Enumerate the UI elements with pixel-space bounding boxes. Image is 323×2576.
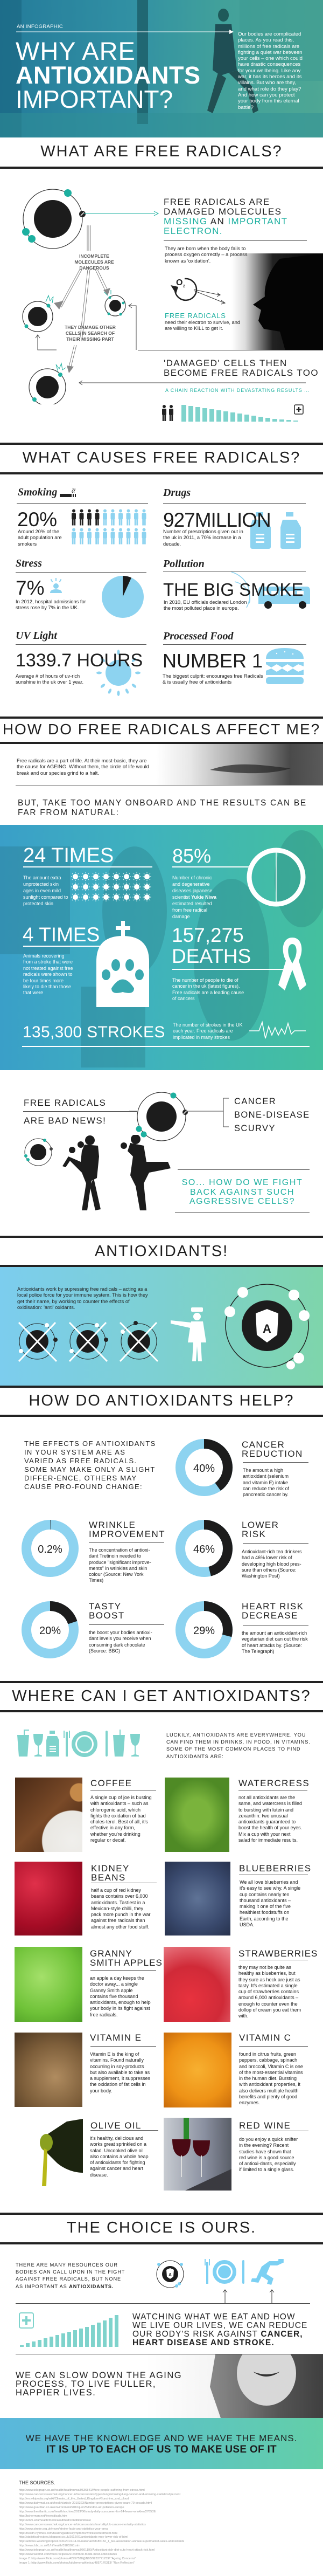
header: how do free radicals affect me: HOW DO FREE RADICALS AFFECT ME? xyxy=(3,721,320,738)
food: coffee: COFFEE xyxy=(90,1778,132,1788)
panel: effects stats: The number of strokes in the UK each year. Free radicals are implicated in many strokes xyxy=(173,1022,243,1040)
food: watercress xyxy=(165,1778,310,1853)
panel: drugs: 927MILLION xyxy=(163,509,271,531)
icon: burger xyxy=(266,648,304,684)
icon: fighters xyxy=(62,1135,171,1210)
text: part of life: Free radicals are a part of life. At their most-basic, they are the cause for AGEING. Without them, the circle of life would break and our species grind to a halt. xyxy=(17,758,149,776)
stat: lower risk 46%: LOWER xyxy=(242,1520,279,1530)
intro paragraph: Our bodies are complicated places. As you read this, millions of free radicals are fighting a quiet war between your cells – one which could have drastic consequences for your wellbeing. Like any war, it has its heroes and its villains. But who are they, and what role do they play? And how can you protect your body from this eternal battle? xyxy=(238,31,303,111)
text: luckily antioxidants everywhere: LUCKILY, ANTIOXIDANTS ARE EVERYWHERE. YOU CAN FIND THEM IN DRINKS, IN FOOD, IN VITAMINS. SOME OF THE MOST COMMON PLACES TO FIND ANTIOXIDANTS ARE: xyxy=(166,1732,311,1759)
icon: O2 cycle xyxy=(171,278,226,304)
text: watching what we eat: OUR BODY'S RISK AGAINST CANCER, xyxy=(132,2330,303,2339)
icons: drinks and food xyxy=(17,1730,149,1758)
panel: uv light: Average # of hours of uv-rich sunshine in the uk over 1 year. xyxy=(16,673,83,685)
sources: http://en.wikipedia.org/wiki/Climate_of_the_United_Kingdom#Sunshine_and_cloud xyxy=(19,2497,129,2501)
sources: http://www.stroke.org.uk/news/stroke-facts-and-statistics-your-area xyxy=(19,2527,108,2531)
text: incomplete molecules xyxy=(74,253,114,271)
definition headline: FREE RADICALS ARE xyxy=(164,197,270,207)
text: they damage xyxy=(65,325,116,342)
photo: smiling woman xyxy=(145,2354,323,2418)
molecule xyxy=(129,1092,229,1141)
panel: antioxidant police: Antioxidants work by supressing free radicals – acting as a local police force for your immune system. This is how they get their name, by working to counter the effects of oxidisation: 'anti' oxidants. xyxy=(17,1286,148,1310)
food: blueberries: BLUEBERRIES xyxy=(239,1863,311,1874)
panel: drugs xyxy=(163,487,306,549)
photo: woman silhouette xyxy=(231,253,323,350)
panel: uv light xyxy=(16,630,146,696)
food: blueberries xyxy=(165,1862,310,1937)
header: the choice is ours: THE CHOICE IS OURS. xyxy=(67,2219,256,2236)
stat: lower risk 46%: Antioxidant-rich tea drinkers had a 46% lower risk of developing high blood pres-sure than others (Source: Washington Post) xyxy=(242,1549,302,1579)
definition headline xyxy=(164,197,287,236)
icon: bottles xyxy=(250,512,301,549)
text: they damage: CELLS IN SEARCH OF xyxy=(66,330,115,336)
food: strawberries: they may not be quite as healthy as blueberries, but they sure as heck are just as tasty. It's estimated a single cup of strawberries contains around 6,000 antioxidants – enough to counter even the dollop of cream you eat them with. xyxy=(238,1965,301,2019)
stat: wrinkle 0.2% xyxy=(21,1519,166,1587)
main rule with arrow from molecule xyxy=(84,211,159,216)
damaged cells headline: BECOME FREE RADICALS TOO xyxy=(164,368,319,378)
hero photo shapes xyxy=(0,0,323,137)
panel: pollution: Pollution xyxy=(163,558,205,570)
food: vitamin c: found in citrus fruits, green peppers, cabbage, spinach and broccoli, Vitamin C is one of the most-essential vitamins in the human diet. Bursting with antioxidant properties, it also delivers multiple health benefits and plenty of good enzymes. xyxy=(239,2051,303,2105)
question: how do we fight back: SO... HOW DO WE FIGHT BACK AGAINST SUCH AGGRESSIVE CELLS? xyxy=(182,1178,303,1206)
panel: processed food: The biggest culprit: encourages free Radicals & is usually free of antioxidants xyxy=(163,673,263,685)
diagram: free radical chain xyxy=(22,189,137,404)
food: kidney beans: half a cup of red kidney beans contains over 6,000 antioxidants. Tastiest in a Mexican-style chilli, they pack more punch in the war against free radicals than almost any other food stuff. xyxy=(91,1888,151,1930)
icons: antioxidant, food, exercise: A xyxy=(168,2272,172,2277)
connector lines xyxy=(36,304,136,350)
text: slow down aging xyxy=(16,2371,193,2397)
damaged cells headline xyxy=(164,358,319,378)
text: watching what we eat: WE LIVE OUR LIVES, WE CAN REDUCE xyxy=(132,2321,307,2330)
hero banner xyxy=(0,0,323,137)
definition headline: DAMAGED MOLECULES xyxy=(164,206,282,217)
icon grid: suns xyxy=(71,872,151,901)
food: blueberries: We all love blueberries and it's easy to see why. A single cup contains nearly ten thousand antioxidants – making it one of the five healthiest foodstuffs on Earth, according to the USDA. xyxy=(240,1879,300,1927)
header: what are free radicals: WHAT ARE FREE RADICALS? xyxy=(40,143,283,160)
stat: strokes: 135,300 STROKES xyxy=(23,1023,165,1041)
panel: effects stats: Animals recovering from a stroke that were not treated against free radicals were shown to be four times more likely to die than those that were xyxy=(23,953,73,995)
icon: antioxidant molecule xyxy=(223,1283,312,1372)
food: coffee: A single cup of joe is busting with antioxidants – such as chlorogenic acid, which fights the oxidation of bad choles-terol. Best of all, it's effective in any form, whether you're drinking regular or decaf. xyxy=(90,1795,152,1843)
chain lines xyxy=(59,225,108,367)
food: vitamin c: VITAMIN C xyxy=(239,2033,291,2043)
stat: 157,275 deaths xyxy=(172,924,251,967)
stat: 4 times: 4 TIMES xyxy=(23,924,100,946)
panel: smoking xyxy=(17,486,148,547)
sources: http://umm.edu/health/medical/altmed/condition/stroke xyxy=(19,2519,91,2522)
stat: cancer reduction 40%: REDUCTION xyxy=(242,1449,303,1459)
panel: stress xyxy=(16,557,146,618)
sources: http://bsherman.net/freeradicals.htm xyxy=(19,2515,67,2518)
sources: THE SOURCES. xyxy=(19,2480,55,2485)
panel: antioxidant police xyxy=(0,1267,323,1386)
food: red wine: RED WINE xyxy=(239,2120,291,2131)
icon: stressed person xyxy=(50,578,62,593)
sources: http://www.cancerresearchuk.org/cancer-info/cancerstats/types/lung/smoking/lung-cancer-and-smoking-statistics#percent xyxy=(19,2493,180,2496)
icons: crossed-out free radicals xyxy=(18,1321,158,1362)
stat: 157,275 deaths: DEATHS xyxy=(172,945,251,967)
food: strawberries: STRAWBERRIES xyxy=(238,1948,318,1959)
panel: pollution: In 2010, EU officials declared London the most polluted place in europe. xyxy=(164,600,247,611)
stat: tasty boost 20% xyxy=(21,1601,166,1660)
sources: http://news.bbc.co.uk/1/hi/health/3185363.stm xyxy=(19,2544,80,2547)
text: many resources: THERE ARE MANY RESOURCES OUR BODIES CAN CALL UPON IN THE FIGHT AGAINST FREE RADICALS, BUT NONE AS IMPORTANT AS ANTIOXIDANTS. xyxy=(16,2262,125,2289)
chart: increasing bars with health cross xyxy=(18,2312,124,2348)
food: granny smith apples: an apple a day keeps the doctor away... a single Granny Smith apple contains five thousand antioxidants, enough to help your body in its fight against free radicals. xyxy=(90,1975,151,2017)
long arrow xyxy=(79,381,306,385)
sources: http://health.nytimes.com/health/guides/symptoms/wrinkles/treatment.html xyxy=(19,2532,117,2535)
panel: uv light: 1339.7 HOURS xyxy=(16,650,143,671)
text: incomplete molecules: INCOMPLETE xyxy=(79,253,109,259)
icon: magnifier ring xyxy=(247,848,306,907)
arrow line xyxy=(16,30,234,34)
panel: drugs: Number of prescriptions given out in the uk in 2011, a 70% increase in a decade. xyxy=(163,529,243,547)
section: free radicals bad news xyxy=(23,1092,310,1213)
panel: processed food xyxy=(163,630,306,685)
panel: uv light: UV Light xyxy=(16,630,57,642)
stat: heart risk 29%: DECREASE xyxy=(242,1610,298,1621)
food: red wine xyxy=(164,2118,310,2193)
food: granny smith apples xyxy=(15,1947,158,2022)
sources: http://www.dailymail.co.uk/health/article-2019323/Number-prescriptions-given-soars-70-decade.html xyxy=(19,2502,152,2505)
stat: cancer reduction 40% xyxy=(175,1438,312,1498)
stat: cancer reduction 40%: 40% xyxy=(193,1463,215,1475)
stat: tasty boost 20%: the boost your bodies antioxi-dant levels you receive when consuming dark chocolate (Source: BBC) xyxy=(89,1630,152,1654)
footer banner xyxy=(0,2418,323,2469)
panel: smoking: Smoking xyxy=(18,486,57,498)
title xyxy=(16,37,200,113)
text: they damage: THEY DAMAGE OTHER xyxy=(65,325,116,330)
food: vitamin e: VITAMIN E xyxy=(90,2033,142,2043)
stat: lower risk 46%: 46% xyxy=(193,1544,215,1555)
stat: cancer reduction 40%: CANCER xyxy=(242,1439,285,1450)
label: an infographic: AN INFOGRAPHIC xyxy=(17,24,63,30)
panel: effects stats: The amount extra unprotected skin ages in even mild sunlight compared to protected skin xyxy=(23,875,68,906)
stat: 157,275 deaths: 157,275 xyxy=(172,924,244,946)
text: born when: They are born when the body fails to process oxygen correctly – a process known as 'oxidation'. xyxy=(165,246,247,264)
small molecule xyxy=(24,1139,53,1166)
footer banner: WE HAVE THE KNOWLEDGE AND WE HAVE THE MEANS. xyxy=(26,2433,297,2443)
food: vitamin e xyxy=(15,2033,158,2108)
icon: heartbeat line xyxy=(249,1021,306,1038)
text: free radicals need electron: need their electron to survive, and are willing to KILL to get it. xyxy=(165,320,240,331)
header: antioxidants: ANTIOXIDANTS! xyxy=(95,1243,228,1260)
text: watching what we eat xyxy=(132,2313,321,2347)
panel: pollution: THE BIG SMOKE xyxy=(163,580,303,600)
food: olive oil: it's healthy, delicious and works great sprinkled on a salad. Uncooked olive oil also contains a whole heap of antioxidants for fighting against cancer and heart disease. xyxy=(90,2136,149,2178)
text: incomplete molecules: DANGEROUS xyxy=(79,265,109,271)
panel: processed food: Processed Food xyxy=(163,630,234,642)
panel: processed food: NUMBER 1 xyxy=(163,650,263,672)
food: watercress: WATERCRESS xyxy=(238,1778,310,1788)
sources: http://www.telegraph.co.uk/health/healthnews/9536841/More-people-suffering-from-stress.html xyxy=(19,2489,145,2492)
text: slow down aging: WE CAN SLOW DOWN THE AGING xyxy=(16,2371,182,2380)
sources: Image 1: http://www.flickr.com/photos/lululemonathletica/4857170313/ "Run Reflection" xyxy=(19,2561,135,2565)
subheading: but take too many: BUT, TAKE TOO MANY ONBOARD AND THE RESULTS CAN BE FAR FROM NATURAL: xyxy=(18,798,307,817)
header: where can I get antioxidants: WHERE CAN I GET ANTIOXIDANTS? xyxy=(12,1688,311,1705)
stat: lower risk 46%: RISK xyxy=(242,1529,266,1539)
sources: http://www.guardian.co.uk/environment/2010/jun/25/london-air-pollution-europe xyxy=(19,2506,124,2509)
food: kidney beans: KIDNEY xyxy=(91,1863,130,1874)
text: free radicals need electron xyxy=(165,312,240,331)
icon: antioxidant molecule: A xyxy=(263,1322,271,1335)
title: WHY ARE xyxy=(16,37,136,65)
panel: effects stats: The number of people to die of cancer in the uk (latest figures). Free radicals are a leading cause of cancers xyxy=(172,977,244,1001)
panel: stress: Stress xyxy=(16,557,42,569)
food: coffee xyxy=(15,1778,158,1853)
list: diseases xyxy=(234,1097,310,1133)
icon: O2 cycle: 2 xyxy=(183,285,185,288)
text: slow down aging: HAPPIER LIVES. xyxy=(16,2388,96,2398)
panel: pollution xyxy=(163,558,310,611)
header: how do antioxidants help: HOW DO ANTIOXIDANTS HELP? xyxy=(29,1392,294,1409)
stat: wrinkle 0.2%: The concentration of antioxi-dant Tretinoin needed to produce "significant improve-ments" in wrinkles and skin colour (Source: New York Times) xyxy=(89,1547,151,1583)
stat: heart risk 29%: HEART RISK xyxy=(242,1601,304,1611)
sources: http://www.cancerresearchuk.org/cancer-info/cancerstats/mortality/uk-cancer-mortality-statistics xyxy=(19,2523,146,2526)
food: granny smith apples: SMITH APPLES xyxy=(90,1958,163,1968)
panel: effects stats: Number of chronic and degenerative diseases japanese scientist Yukie Niwa estimated resulted from free radical damage xyxy=(172,875,216,919)
icon: O2 cycle: O xyxy=(176,278,182,287)
sources: http://www.theatlantic.com/health/archive/2013/06/study-daily-sunscreen-for-24-fewer-wrinkles/276539/ xyxy=(19,2510,156,2513)
list: diseases: BONE-DISEASE xyxy=(234,1110,310,1120)
title: ANTIOXIDANTS xyxy=(16,61,200,89)
section: free radicals bad news: ARE BAD NEWS! xyxy=(24,1115,106,1126)
sources: http://statisticalrecipes.blogspot.co.uk/2012/07/antioxidants-may-lower-risk-of.html xyxy=(19,2536,128,2539)
header: what causes: WHAT CAUSES FREE RADICALS? xyxy=(23,449,300,466)
panel: smoking: Around 20% of the adult population are smokers xyxy=(18,529,62,547)
main molecule xyxy=(22,189,86,249)
icon: police officer xyxy=(171,1307,206,1361)
panel: stress: 7% xyxy=(16,577,44,599)
icon: bus xyxy=(258,587,310,609)
icon: pet tombstone xyxy=(96,921,149,1007)
stat: heart risk 29%: 29% xyxy=(193,1625,215,1637)
chart: decreasing bars xyxy=(162,404,304,422)
stat: heart risk 29% xyxy=(175,1601,312,1660)
text: free radicals need electron: FREE RADICALS xyxy=(165,312,226,320)
stat: cancer reduction 40%: The amount a high antioxidant (selenium and vitamin E) intake can reduce the risk of pancreatic cancer by. xyxy=(243,1468,289,1497)
stat: tasty boost 20%: TASTY xyxy=(89,1601,122,1611)
section: free radicals bad news: FREE RADICALS xyxy=(24,1098,106,1108)
stat: tasty boost 20%: BOOST xyxy=(89,1610,125,1621)
sources: http://www.telegraph.co.uk/health/healthnews/9561190/Antioxidant-rich-diet-cuts-heart-attack-risk.html xyxy=(19,2549,155,2552)
stat: wrinkle 0.2%: WRINKLE xyxy=(89,1520,136,1530)
stat: lower risk 46% xyxy=(175,1519,312,1579)
food: red wine: do you enjoy a quick snifter in the evening? Recent studies have shown that red wine is a good source of antioxi-dants, especially if limited to a single glass. xyxy=(239,2137,298,2172)
food: olive oil xyxy=(34,2118,158,2193)
panel: drugs: Drugs xyxy=(163,487,191,499)
stat: wrinkle 0.2%: IMPROVEMENT xyxy=(89,1529,165,1539)
footer banner: IT IS UP TO EACH OF US TO MAKE USE OF IT xyxy=(46,2444,277,2455)
text: effects intro: THE EFFECTS OF ANTIOXIDANTS IN YOUR SYSTEM ARE AS VARIED AS FREE RADICALS. SOME MAY MAKE ONLY A SLIGHT DIFFER-ENCE, OTHERS MAY CAUSE PRO-FOUND CHANGE: xyxy=(24,1439,156,1491)
chart: pie 7% xyxy=(102,576,144,618)
icons: antioxidant, food, exercise xyxy=(156,2259,291,2305)
stat: 85%: 85% xyxy=(172,845,211,867)
stat: 24 times: 24 TIMES xyxy=(23,844,114,867)
panel: stress: In 2012, hospital admissions for stress rose by 7% in the UK. xyxy=(16,599,86,610)
stat: heart risk 29%: the amount an antioxidant-rich vegetarian diet can out the risk of heart attacks by. (Source: The Telegraph) xyxy=(242,1630,308,1654)
stat: wrinkle 0.2%: 0.2% xyxy=(38,1544,62,1555)
text: incomplete molecules: MOLECULES ARE xyxy=(74,259,114,265)
food: vitamin c xyxy=(164,2033,310,2108)
food: watercress: not all antioxidants are the same, and watercress is filled to bursting with lutein and zexanthin: two unusual antioxidants guaranteed to boost the health of your eyes. Mix a cup with your next salad for immediate results. xyxy=(238,1795,302,1843)
photo: wrinkles xyxy=(156,744,323,785)
food: granny smith apples: GRANNY xyxy=(90,1948,132,1959)
food: olive oil: OLIVE OIL xyxy=(90,2120,142,2131)
damaged cells headline: 'DAMAGED' CELLS THEN xyxy=(164,358,287,368)
text: slow down aging: PROCESS, TO LIVE FULLER, xyxy=(16,2379,156,2389)
food: kidney beans xyxy=(15,1862,158,1937)
definition headline: MISSING AN IMPORTANT xyxy=(164,216,287,226)
food: strawberries xyxy=(164,1947,310,2022)
sources xyxy=(19,2480,288,2566)
icon grid: people xyxy=(72,509,146,545)
icon: sun xyxy=(96,650,141,696)
title: IMPORTANT? xyxy=(16,85,173,113)
list: diseases: SCURVY xyxy=(234,1124,276,1133)
text: watching what we eat: WATCHING WHAT WE EAT AND HOW xyxy=(132,2312,296,2322)
definition headline: ELECTRON. xyxy=(164,226,223,236)
icon: cigarette xyxy=(60,487,76,497)
text: chain reaction: A CHAIN REACTION WITH DEVASTATING RESULTS ... xyxy=(165,388,310,393)
sources: http://articles.washingtonpost.com/2013-04-01/national/38185182_1_tea-association-annual-supermarket-sales-antioxidants xyxy=(19,2540,184,2543)
sources: http://www.webmd.com/food-recipes/20-common-foods-most-antioxidants xyxy=(19,2553,117,2556)
food: kidney beans: BEANS xyxy=(91,1872,126,1883)
list: diseases: CANCER xyxy=(234,1097,276,1106)
text: watching what we eat: HEART DISEASE AND STROKE. xyxy=(132,2338,275,2347)
icon: ribbon xyxy=(278,938,306,990)
stat: tasty boost 20%: 20% xyxy=(39,1625,61,1637)
panel: effects stats xyxy=(0,825,323,1070)
text: they damage: THEIR MISSING PART xyxy=(66,336,114,342)
sources: Image 2: http://www.flickr.com/photos/42957538@N03/9233771239/ "Ageing Concerns" xyxy=(19,2557,136,2560)
food: vitamin e: Vitamin E is the king of vitamins. Found naturally occurring in soy-products but also available to take as a supplement, it suppresses the oxidation of fat cells in your body. xyxy=(90,2051,150,2093)
panel: smoking: 20% xyxy=(17,508,57,531)
cells xyxy=(23,290,125,405)
